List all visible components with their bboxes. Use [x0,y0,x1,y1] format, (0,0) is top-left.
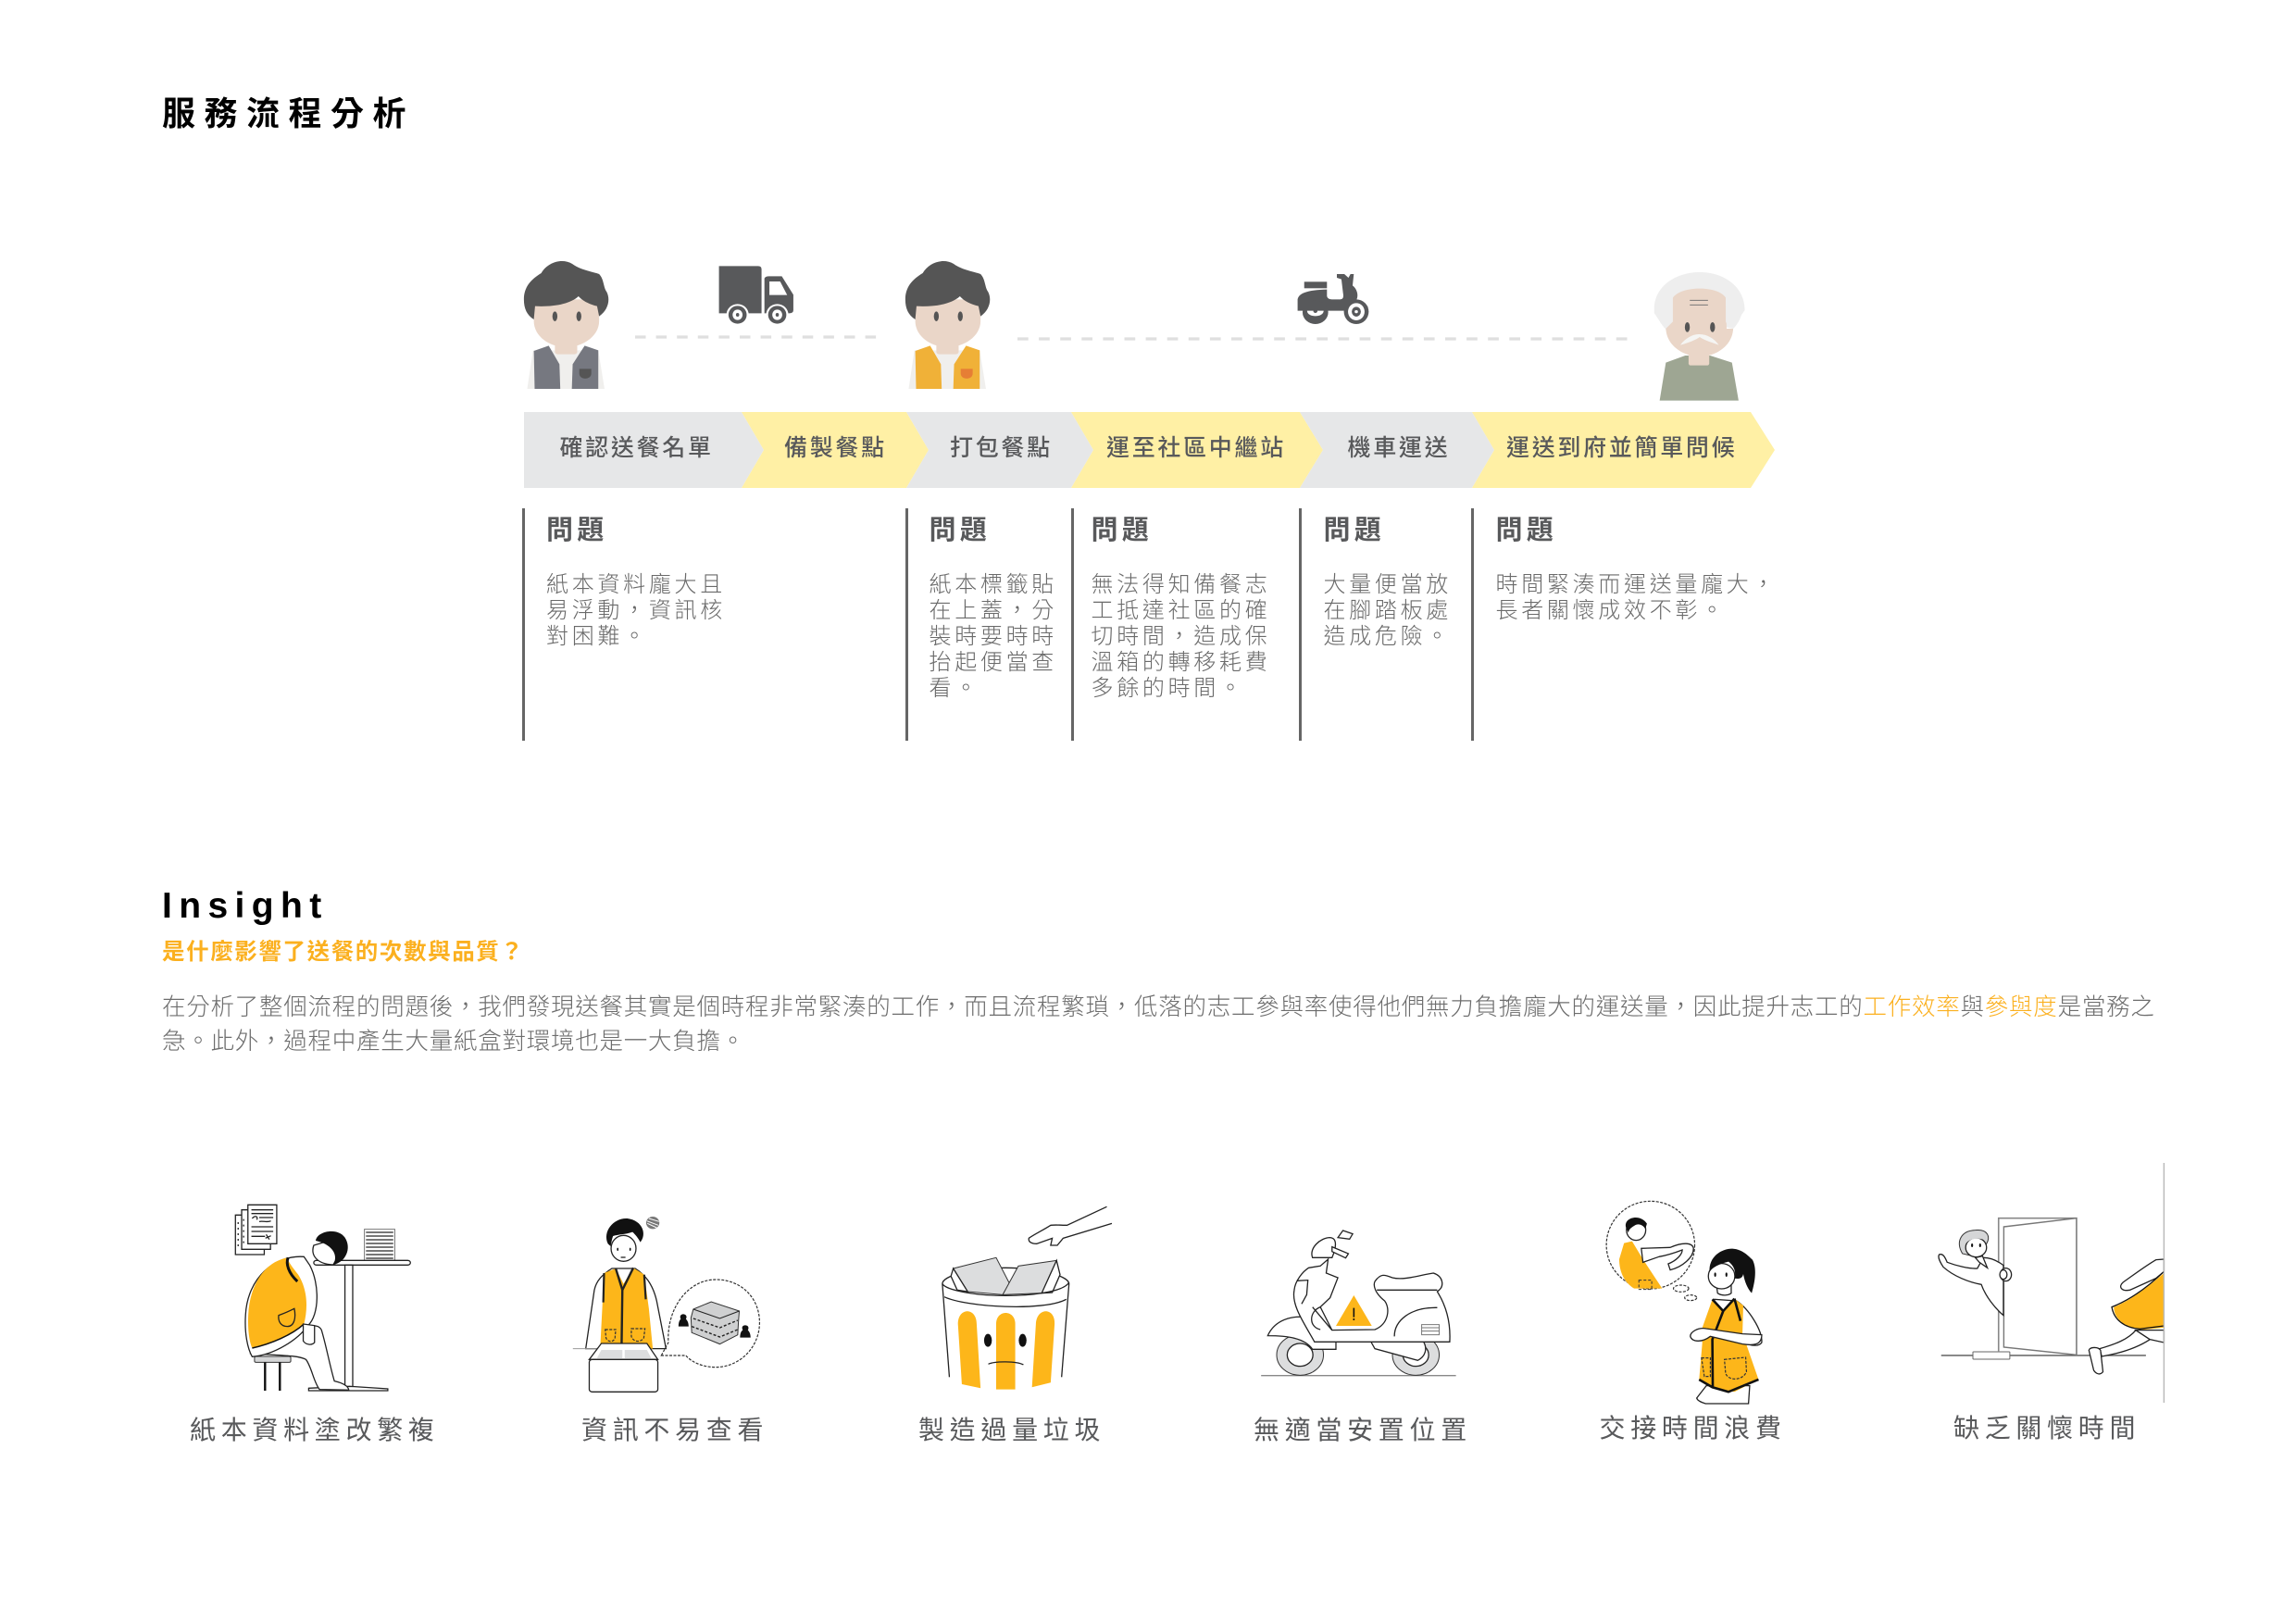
illustration: volunteer unable to read box information [573,1217,759,1392]
problem column 4: 問題 [1324,516,1385,545]
problem column 4 [1299,508,1452,741]
problem column 2 [905,508,1057,741]
problem column 1: 易浮動，資訊核 [546,598,726,623]
problem column 1 [522,508,726,741]
problem column 2: 在上蓋，分 [930,598,1057,623]
problem column 1: 對困難。 [546,624,649,649]
problem column 3: 切時間，造成保 [1091,624,1270,649]
problem column 5 [1471,508,1778,741]
problem column 5: 長者關懷成效不彰。 [1496,598,1727,623]
step: transport to community station: 運至社區中繼站 [1106,435,1286,461]
problem column 4: 造成危險。 [1324,624,1452,649]
icon: scooter [1298,274,1368,324]
icon: truck [719,266,793,326]
problem column 4: 在腳踏板處 [1324,598,1452,623]
step: home delivery and greeting: 運送到府並簡單問候 [1506,435,1737,461]
problem column 3: 工抵達社區的確 [1091,598,1270,623]
step: home delivery and greeting [1472,412,1775,488]
step: prepare meals: 備製餐點 [784,435,887,461]
problem column 2: 裝時要時時 [930,624,1057,649]
problem column 3: 問題 [1091,516,1153,545]
caption: handover time wasted: 交接時間浪費 [1600,1414,1787,1443]
problem column 1: 問題 [546,516,607,545]
insight paragraph: 急。此外，過程中產生大量紙盒對環境也是一大負擔。 [162,1029,745,1055]
heading: Insight: Insight [162,886,329,926]
step: confirm delivery list: 確認送餐名單 [559,435,714,461]
process bar: six chevron steps [524,412,1775,488]
insight paragraph [162,994,2155,1055]
dashed connector: second leg [1017,337,1628,341]
caption: excessive trash: 製造過量垃圾 [918,1416,1105,1444]
caption: paper data alterations are complicated: 紙本資料塗改繁複 [190,1416,440,1444]
problem column 3: 無法得知備餐志 [1091,572,1270,597]
problem column 1: 紙本資料龐大且 [546,572,726,597]
problem column 3: 溫箱的轉移耗費 [1091,650,1270,675]
subheading question: 是什麼影響了送餐的次數與品質？ [162,939,524,965]
title: service flow analysis: 服務流程分析 [162,94,415,132]
step: prepare meals [742,412,929,488]
character: volunteer in grey vest [524,261,608,389]
step: motorcycle transport: 機車運送 [1348,435,1450,461]
character: volunteer in orange vest [905,261,990,389]
problem column 2: 問題 [930,516,991,545]
step: motorcycle transport [1300,412,1494,488]
illustration: scooter with warning sign [1261,1230,1456,1376]
insight paragraph: 在分析了整個流程的問題後，我們發現送餐其實是個時程非常緊湊的工作，而且流程繁瑣，低落的志工參與率使得他們無力負擔龐大的運送量，因此提升志工的工作效率與參與度是當務之 [162,994,2155,1020]
caption: information hard to check: 資訊不易查看 [581,1416,768,1444]
problem column 5: 問題 [1496,516,1557,545]
step: transport to community station [1071,412,1323,488]
illustration: trash bin overflowing with boxes [942,1206,1112,1390]
step: confirm delivery list [524,412,764,488]
illustration: volunteer checking watch, thinking about handover [1606,1201,1762,1404]
problem column 4: 大量便當放 [1324,572,1452,597]
problem column 2: 看。 [930,676,980,701]
problem column 3: 多餘的時間。 [1091,676,1245,701]
dashed connector: first leg [635,335,877,339]
step: pack meals [906,412,1093,488]
step: pack meals: 打包餐點 [950,435,1053,461]
problem column 2: 抬起便當查 [930,650,1057,675]
illustration: volunteer rushing away from elderly man at door [1939,1163,2164,1403]
caption: no suitable storage position: 無適當安置位置 [1254,1416,1472,1444]
illustration: tired volunteer with paper records [235,1205,410,1391]
problem column 3 [1071,508,1270,741]
problem column 5: 時間緊湊而運送量龐大， [1496,572,1778,597]
character: elderly man [1654,272,1745,401]
caption: lack of care time: 缺乏關懷時間 [1953,1414,2140,1443]
problem column 2: 紙本標籤貼 [930,572,1057,597]
